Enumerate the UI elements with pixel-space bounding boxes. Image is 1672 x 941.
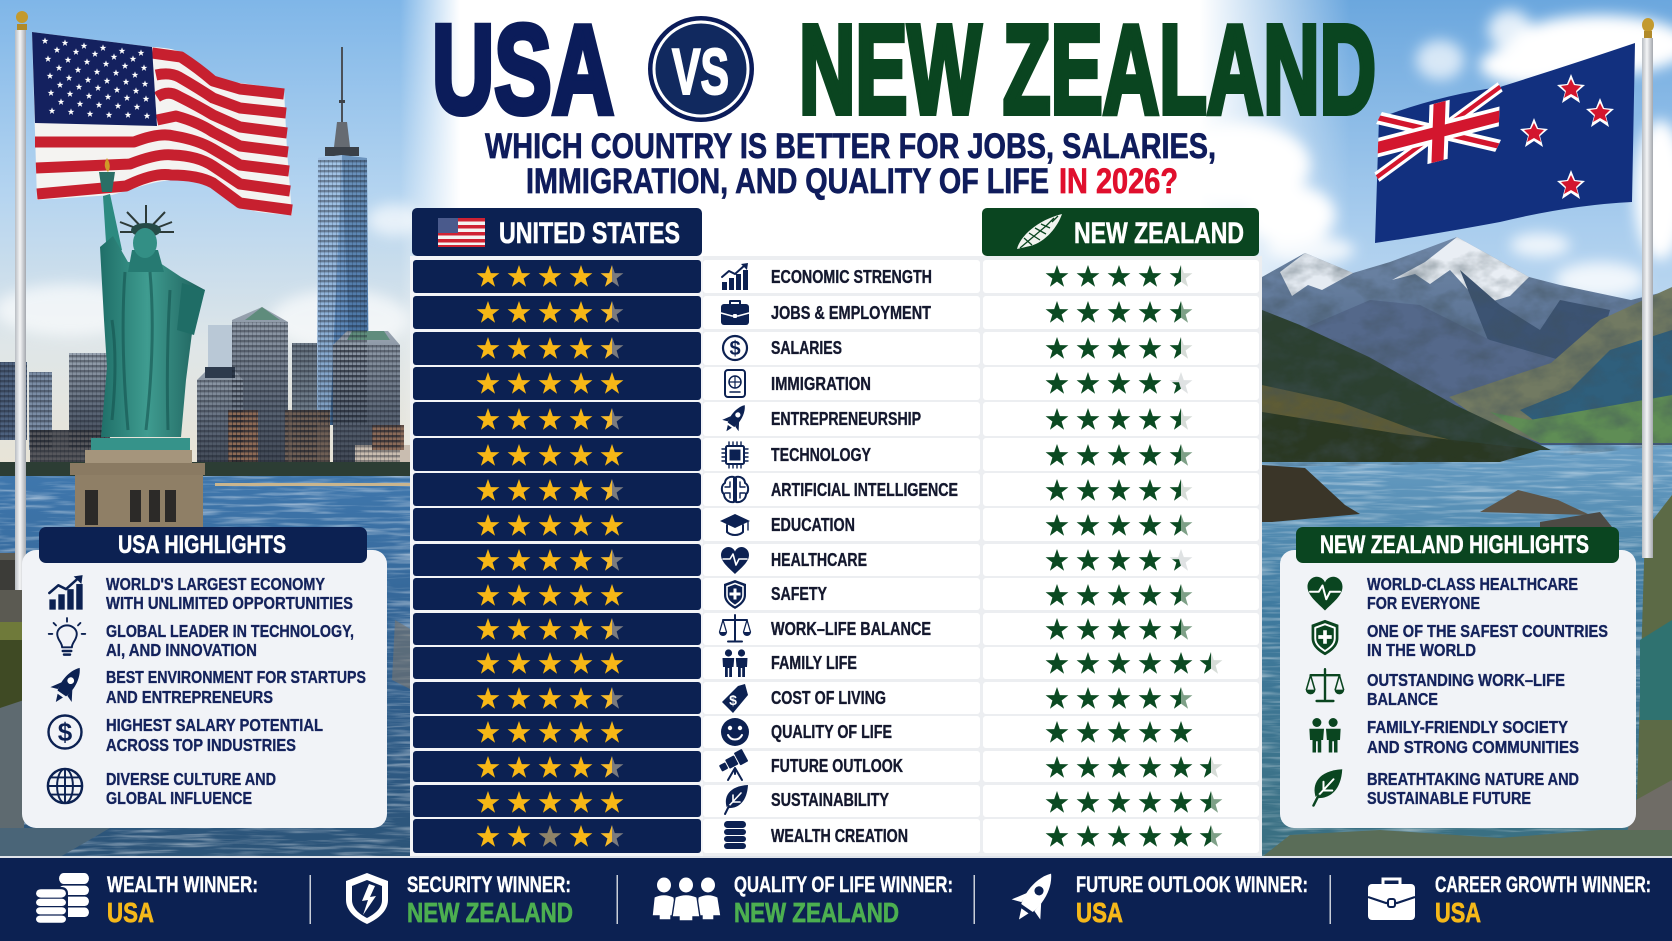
NZ rating: Work-Life Balance xyxy=(983,613,1259,645)
highlight: technology leader xyxy=(49,618,354,660)
category: Work-Life Balance xyxy=(703,613,980,645)
highlight: safety xyxy=(1312,620,1608,660)
flagpole: New Zealand xyxy=(1642,18,1654,558)
category: Cost of Living: $ xyxy=(729,692,737,708)
USA rating: Sustainability xyxy=(413,785,701,817)
winner: wealth: WEALTH WINNER: xyxy=(107,872,258,897)
VS badge xyxy=(648,16,754,122)
category: Future Outlook: FUTURE OUTLOOK xyxy=(771,756,903,776)
category: Quality of Life xyxy=(703,716,980,748)
highlight: diverse culture: DIVERSE CULTURE AND xyxy=(106,769,276,789)
category: Salaries xyxy=(703,332,980,365)
category: Wealth Creation xyxy=(703,819,980,853)
USA rating: Work-Life Balance xyxy=(413,613,701,645)
winner: security xyxy=(346,872,573,928)
highlight: family-friendly: AND STRONG COMMUNITIES xyxy=(1367,737,1579,757)
New Zealand ratings column xyxy=(983,260,1259,853)
NZ rating: Wealth Creation xyxy=(983,819,1259,853)
highlight: startups xyxy=(45,660,366,709)
highlight: work-life balance: BALANCE xyxy=(1367,689,1438,709)
category: Healthcare xyxy=(703,544,980,576)
bottom winners bar xyxy=(0,856,1672,941)
category: Immigration xyxy=(703,367,980,400)
highlight: nature xyxy=(1314,769,1579,808)
highlight: healthcare: WORLD-CLASS HEALTHCARE xyxy=(1367,574,1578,594)
comparison table background xyxy=(410,256,1262,857)
winner: quality of life: NEW ZEALAND xyxy=(734,897,899,928)
winner: quality of life: QUALITY OF LIFE WINNER: xyxy=(734,872,953,897)
category: Safety: SAFETY xyxy=(771,584,827,604)
NZ rating: Artificial Intelligence xyxy=(983,473,1259,506)
highlight: startups: AND ENTREPRENEURS xyxy=(106,687,273,707)
highlight: healthcare: FOR EVERYONE xyxy=(1367,593,1480,613)
highlight: startups: BEST ENVIRONMENT FOR STARTUPS xyxy=(106,667,366,687)
NZ rating: Family Life xyxy=(983,647,1259,679)
NZ rating: Economic Strength xyxy=(983,260,1259,293)
category: Education xyxy=(703,508,980,541)
category: Technology: TECHNOLOGY xyxy=(771,445,871,465)
USA rating: Economic Strength xyxy=(413,260,701,293)
New Zealand flag xyxy=(1375,43,1635,243)
category: Family Life: FAMILY LIFE xyxy=(771,653,857,673)
category: Jobs & Employment xyxy=(703,296,980,329)
winner: future outlook xyxy=(1005,864,1308,930)
USA rating: Quality of Life xyxy=(413,716,701,748)
icon: rocket xyxy=(1005,864,1065,930)
highlight: work-life balance: OUTSTANDING WORK–LIFE xyxy=(1367,670,1565,690)
USA rating: Education xyxy=(413,508,701,541)
icon: three people xyxy=(652,878,721,921)
category: Cost of Living xyxy=(703,682,980,714)
highlight: healthcare xyxy=(1308,574,1578,613)
NZ rating: Salaries xyxy=(983,332,1259,365)
category: Sustainability xyxy=(703,785,980,817)
category: Salaries: SALARIES xyxy=(771,338,842,358)
USA rating: Immigration xyxy=(413,367,701,400)
category: Wealth Creation: WEALTH CREATION xyxy=(771,826,908,846)
category: Economic Strength: ECONOMIC STRENGTH xyxy=(771,267,932,287)
highlight: salary potential: ACROSS TOP INDUSTRIES xyxy=(106,735,296,755)
USA rating: Jobs & Employment xyxy=(413,296,701,329)
USA column header: UNITED STATES xyxy=(499,217,680,250)
heading: USA highlights xyxy=(39,527,367,563)
highlight: family-friendly xyxy=(1309,717,1579,757)
right scenery: mountains and lake xyxy=(1262,236,1672,857)
Statue of Liberty xyxy=(70,158,205,527)
highlight: technology leader: GLOBAL LEADER IN TECHNOLOGY, xyxy=(106,621,354,641)
USA rating: Future Outlook xyxy=(413,751,701,782)
New Zealand column header xyxy=(982,208,1259,256)
winner: future outlook: USA xyxy=(1076,897,1123,928)
USA rating: Cost of Living xyxy=(413,682,701,714)
icon: silver fern xyxy=(1017,214,1062,249)
category: Entrepreneurship xyxy=(703,399,980,437)
highlight: salary potential: HIGHEST SALARY POTENTIAL xyxy=(106,715,323,735)
title xyxy=(432,0,1376,140)
highlight: technology leader: AI, AND INNOVATION xyxy=(106,640,257,660)
winner: security: NEW ZEALAND xyxy=(407,897,573,928)
winner: career growth: USA xyxy=(1435,897,1481,928)
highlight: safety: IN THE WORLD xyxy=(1367,640,1476,660)
category: Education: EDUCATION xyxy=(771,515,855,535)
category: Healthcare: HEALTHCARE xyxy=(771,550,867,570)
icon: shield xyxy=(346,873,388,924)
category: Family Life xyxy=(703,647,980,679)
icon: US flag xyxy=(438,218,485,247)
winner: quality of life xyxy=(652,872,953,928)
heading: New Zealand highlights xyxy=(1296,527,1619,563)
highlight: family-friendly: FAMILY-FRIENDLY SOCIETY xyxy=(1367,717,1568,737)
NZ rating: Entrepreneurship xyxy=(983,402,1259,436)
subtitle: IN 2026? xyxy=(1059,162,1178,201)
highlight: largest economy: WITH UNLIMITED OPPORTUNITIES xyxy=(106,593,353,613)
icon: coins xyxy=(34,873,89,925)
left water xyxy=(0,476,412,857)
winner: wealth: USA xyxy=(107,897,154,928)
NZ rating: Safety xyxy=(983,578,1259,610)
USA rating: Salaries xyxy=(413,332,701,365)
New Zealand column header: NEW ZEALAND xyxy=(1074,217,1244,250)
NZ rating: Future Outlook xyxy=(983,751,1259,782)
category: Sustainability: SUSTAINABILITY xyxy=(771,790,889,810)
highlight: nature: SUSTAINABLE FUTURE xyxy=(1367,788,1531,808)
highlight: work-life balance xyxy=(1306,669,1565,709)
subtitle: IMMIGRATION, AND QUALITY OF LIFE xyxy=(526,162,1049,201)
USA ratings column xyxy=(413,260,701,853)
category: Quality of Life: QUALITY OF LIFE xyxy=(771,722,892,742)
icon: briefcase xyxy=(1368,879,1415,920)
NZ rating: Immigration xyxy=(983,367,1259,400)
USA rating: Healthcare xyxy=(413,544,701,576)
highlight: largest economy xyxy=(49,574,353,613)
category: Technology xyxy=(703,438,980,471)
USA rating: Wealth Creation xyxy=(413,819,701,853)
NZ rating: Sustainability xyxy=(983,785,1259,817)
panel: USA highlights xyxy=(22,527,387,828)
heading: USA highlights: USA HIGHLIGHTS xyxy=(118,531,286,559)
category: Jobs & Employment: JOBS & EMPLOYMENT xyxy=(771,303,931,323)
winner: security: SECURITY WINNER: xyxy=(407,872,571,897)
category: Work-Life Balance: WORK–LIFE BALANCE xyxy=(771,619,931,639)
subtitle: WHICH COUNTRY IS BETTER FOR JOBS, SALARIES, xyxy=(485,127,1216,166)
NZ rating: Cost of Living xyxy=(983,682,1259,714)
USA rating: Family Life xyxy=(413,647,701,679)
USA column header xyxy=(412,208,702,256)
category: Safety xyxy=(703,578,980,610)
highlight: largest economy: WORLD'S LARGEST ECONOMY xyxy=(106,574,325,594)
highlight: diverse culture: GLOBAL INFLUENCE xyxy=(106,788,252,808)
highlight: diverse culture xyxy=(48,769,276,808)
VS badge: VS xyxy=(672,35,729,108)
NZ rating: Technology xyxy=(983,438,1259,471)
title: USA: USA xyxy=(432,0,614,140)
USA rating: Technology xyxy=(413,438,701,471)
category: Artificial Intelligence xyxy=(703,473,980,506)
category: Economic Strength xyxy=(703,260,980,293)
USA rating: Safety xyxy=(413,578,701,610)
category: Salaries: $ xyxy=(729,338,741,360)
category labels column xyxy=(703,260,980,853)
highlight: safety: ONE OF THE SAFEST COUNTRIES xyxy=(1367,621,1608,641)
panel: New Zealand highlights xyxy=(1280,527,1636,828)
left scenery: New York skyline xyxy=(0,47,412,478)
one world trade center tower xyxy=(317,47,369,425)
category: Cost of Living: COST OF LIVING xyxy=(771,688,886,708)
highlight: salary potential: $ xyxy=(58,717,73,747)
highlight: nature: BREATHTAKING NATURE AND xyxy=(1367,769,1579,789)
USA rating: Artificial Intelligence xyxy=(413,473,701,506)
subtitle xyxy=(485,127,1216,201)
NZ rating: Quality of Life xyxy=(983,716,1259,748)
winner: career growth xyxy=(1368,872,1651,928)
NZ rating: Healthcare xyxy=(983,544,1259,576)
category: Artificial Intelligence: ARTIFICIAL INTELLIGENCE xyxy=(771,480,958,500)
category: Future Outlook xyxy=(703,749,980,782)
winner: wealth xyxy=(34,872,258,928)
USA rating: Entrepreneurship xyxy=(413,402,701,436)
category: Entrepreneurship: ENTREPRENEURSHIP xyxy=(771,409,921,429)
American flag xyxy=(32,32,292,215)
category: Immigration: IMMIGRATION xyxy=(771,374,871,394)
heading: New Zealand highlights: NEW ZEALAND HIGHLIGHTS xyxy=(1320,531,1589,559)
NZ rating: Jobs & Employment xyxy=(983,296,1259,329)
winner: future outlook: FUTURE OUTLOOK WINNER: xyxy=(1076,872,1308,897)
flagpole: USA xyxy=(15,11,28,590)
highlight: salary potential xyxy=(48,715,323,755)
NZ rating: Education xyxy=(983,508,1259,541)
